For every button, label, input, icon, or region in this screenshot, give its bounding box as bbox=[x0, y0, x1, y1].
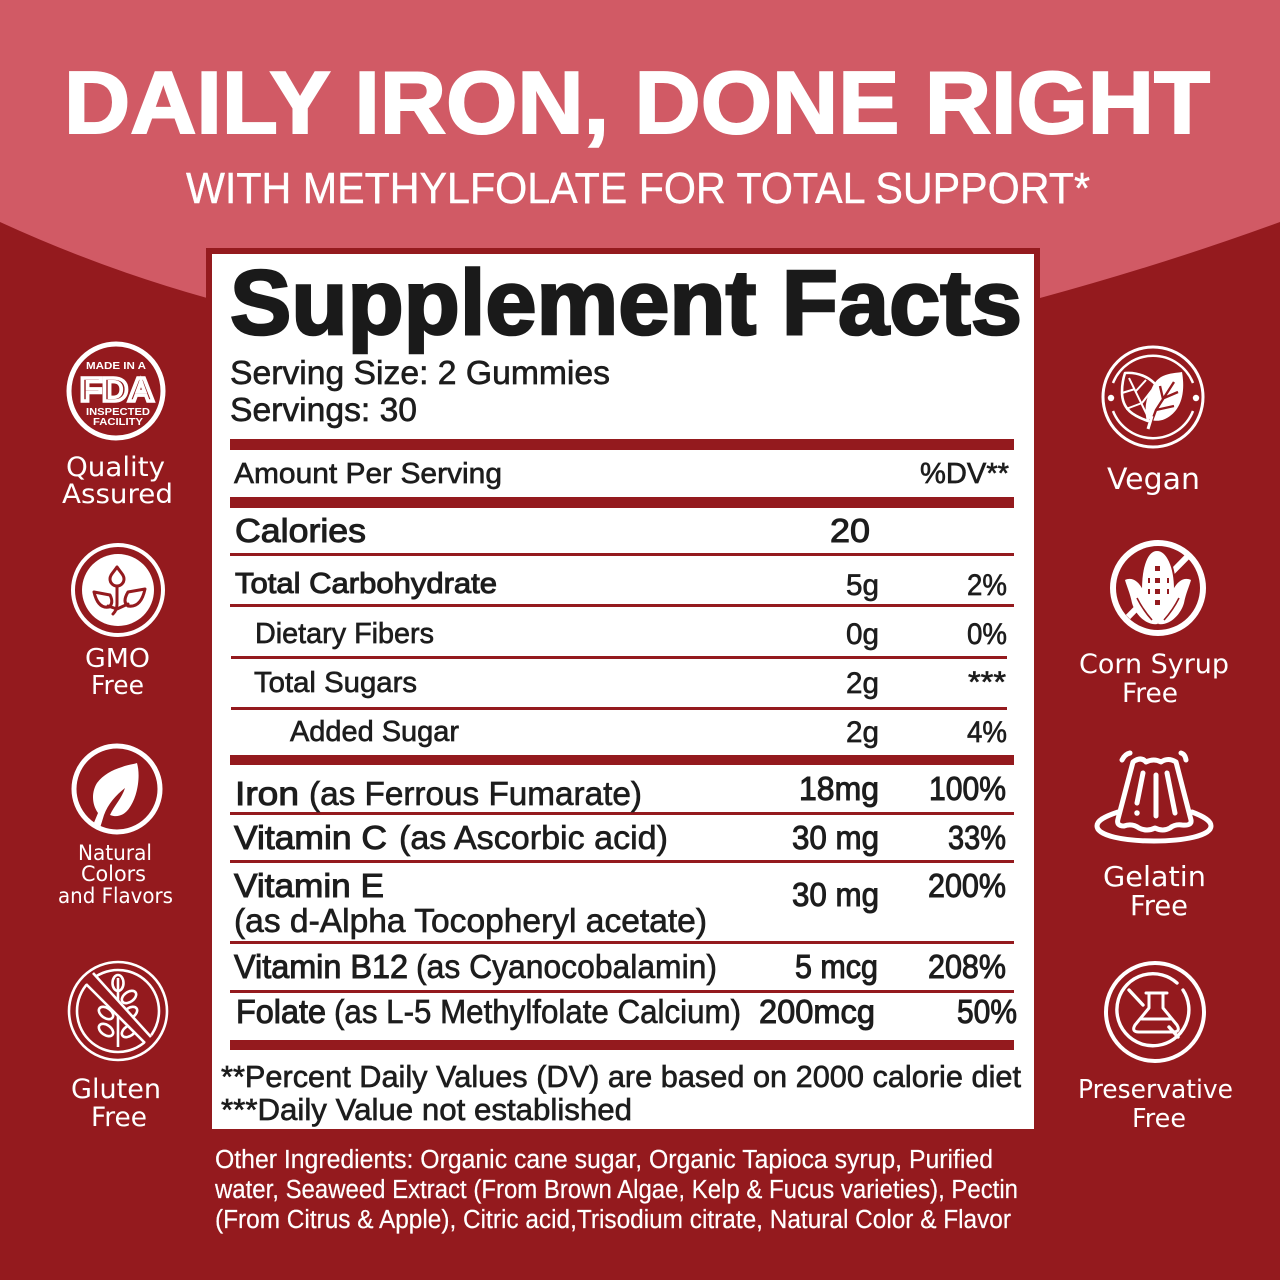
label: natural colors and flavors bbox=[58, 841, 173, 908]
badge: preservative free bbox=[1078, 963, 1233, 1134]
row: total carbohydrate: Total Carbohydrate bbox=[235, 568, 497, 600]
row: folate: 200mcg bbox=[759, 993, 875, 1030]
label: GMO free bbox=[85, 644, 150, 701]
label: quality assured: Quality bbox=[66, 452, 165, 483]
icon: FDA seal: FACILITY bbox=[93, 416, 143, 428]
label: gluten free: Free bbox=[91, 1102, 147, 1133]
icon: FDA seal: MADE IN A bbox=[86, 360, 146, 372]
row: vitamin c: (as Ascorbic acid) bbox=[399, 819, 668, 856]
badge: gelatin free bbox=[1097, 753, 1211, 922]
row: iron: (as Ferrous Fumarate) bbox=[309, 775, 642, 812]
row: calories: Calories bbox=[235, 512, 366, 549]
label: quality assured bbox=[62, 452, 173, 510]
other ingredients: Other Ingredients: Organic cane sugar, Organic Tapioca syrup, Purified bbox=[215, 1146, 993, 1174]
panel: supplement facts bbox=[206, 248, 1040, 1130]
label: GMO free: Free bbox=[91, 671, 144, 701]
row: total sugars: Total Sugars bbox=[254, 667, 417, 699]
row: calories bbox=[235, 512, 870, 549]
row: vitamin b12: 5 mcg bbox=[795, 948, 878, 985]
icon: jelly mold bbox=[1097, 753, 1211, 841]
label: corn syrup free: Free bbox=[1122, 678, 1178, 709]
row: total sugars bbox=[254, 666, 1006, 700]
badge: gluten free bbox=[69, 962, 167, 1133]
footnotes: ***Daily Value not established bbox=[221, 1092, 632, 1127]
row: dietary fibers: Dietary Fibers bbox=[255, 618, 434, 650]
badge: vegan bbox=[1103, 347, 1203, 496]
label: natural colors and flavors: and Flavors bbox=[58, 884, 173, 908]
label: GMO free: GMO bbox=[85, 644, 150, 674]
label: preservative free: Preservative bbox=[1078, 1075, 1233, 1105]
row: vitamin c: Vitamin C bbox=[234, 819, 387, 856]
row: vitamin b12 bbox=[234, 948, 1006, 985]
row: vitamin e: Vitamin E bbox=[234, 867, 384, 904]
icon: crossed corn bbox=[1113, 543, 1203, 633]
row: iron: 100% bbox=[929, 770, 1006, 807]
row: iron bbox=[235, 770, 1006, 812]
label: corn syrup free bbox=[1079, 649, 1229, 709]
row: amount per serving: Amount Per Serving bbox=[234, 458, 502, 490]
icon: FDA seal bbox=[69, 344, 163, 438]
row: added sugar: Added Sugar bbox=[290, 716, 459, 748]
footnotes bbox=[221, 1059, 1021, 1127]
label: gelatin free bbox=[1103, 860, 1206, 922]
row: amount per serving: %DV** bbox=[920, 458, 1009, 490]
label: gelatin free: Gelatin bbox=[1103, 860, 1206, 893]
label: quality assured: Assured bbox=[62, 479, 173, 510]
icon: vegan leaves bbox=[1103, 347, 1203, 447]
other ingredients: (From Citrus & Apple), Citric acid,Trisodium citrate, Natural Color & Flavor bbox=[215, 1206, 1011, 1234]
row: folate: Folate bbox=[236, 993, 326, 1030]
badge: GMO free bbox=[73, 545, 163, 701]
row: total sugars: *** bbox=[968, 666, 1006, 699]
row: iron: Iron bbox=[235, 775, 299, 812]
row: added sugar: 2g bbox=[846, 716, 879, 749]
row: vitamin e: 30 mg bbox=[792, 876, 879, 913]
row: iron: 18mg bbox=[799, 770, 879, 807]
row: dietary fibers: 0g bbox=[846, 618, 879, 651]
badge: corn syrup free bbox=[1079, 543, 1229, 709]
icon: FDA seal: INSPECTED bbox=[86, 406, 150, 418]
row: vitamin c: 33% bbox=[948, 819, 1006, 856]
label: natural colors and flavors: Natural bbox=[78, 841, 152, 865]
other ingredients bbox=[214, 1146, 1018, 1234]
icon: sprout seal bbox=[73, 545, 163, 635]
row: added sugar: 4% bbox=[967, 716, 1007, 749]
row: vitamin e: (as d-Alpha Tocopheryl acetate) bbox=[234, 902, 707, 939]
row: vitamin c bbox=[234, 819, 1006, 856]
row: amount per serving bbox=[234, 458, 1009, 490]
table rules bbox=[230, 439, 1014, 1050]
row: dietary fibers bbox=[255, 618, 1007, 651]
row: vitamin e bbox=[234, 867, 1006, 939]
other ingredients: water, Seaweed Extract (From Brown Algae, Kelp & Fucus varieties), Pectin bbox=[214, 1176, 1018, 1204]
row: folate bbox=[236, 993, 1017, 1030]
row: total carbohydrate: 2% bbox=[967, 569, 1007, 602]
label: gelatin free: Free bbox=[1130, 889, 1188, 922]
label: natural colors and flavors: Colors bbox=[81, 862, 146, 886]
label: gluten free bbox=[71, 1074, 161, 1133]
icon: FDA seal: FDA bbox=[80, 371, 154, 408]
serving information: Servings: 30 bbox=[230, 391, 417, 428]
icon: crossed flask bbox=[1106, 963, 1204, 1061]
row: folate: 50% bbox=[957, 993, 1017, 1030]
badge: natural colors and flavors bbox=[58, 746, 173, 908]
subtitle: WITH METHYLFOLATE FOR TOTAL SUPPORT* bbox=[186, 164, 1090, 213]
label: gluten free: Gluten bbox=[71, 1074, 161, 1105]
row: vitamin b12: (as Cyanocobalamin) bbox=[416, 948, 717, 985]
row: total carbohydrate bbox=[235, 568, 1007, 602]
label: corn syrup free: Corn Syrup bbox=[1079, 649, 1229, 680]
label: preservative free: Free bbox=[1132, 1104, 1186, 1134]
header curved band bbox=[0, 0, 1280, 340]
row: calories: 20 bbox=[830, 512, 870, 549]
label: vegan: Vegan bbox=[1107, 462, 1200, 496]
heading: supplement facts: Supplement Facts bbox=[230, 252, 1022, 354]
row: vitamin c: 30 mg bbox=[792, 819, 879, 856]
row: dietary fibers: 0% bbox=[967, 618, 1007, 651]
label: preservative free bbox=[1078, 1075, 1233, 1134]
icon: leaf in circle bbox=[74, 746, 160, 832]
serving information bbox=[230, 354, 610, 428]
row: total carbohydrate: 5g bbox=[846, 569, 879, 602]
row: total sugars: 2g bbox=[846, 667, 879, 700]
row: added sugar bbox=[290, 716, 1007, 749]
row: folate: (as L-5 Methylfolate Calcium) bbox=[334, 993, 741, 1030]
footnotes: **Percent Daily Values (DV) are based on 2000 calorie diet bbox=[221, 1059, 1021, 1094]
serving information: Serving Size: 2 Gummies bbox=[230, 354, 610, 391]
title: DAILY IRON, DONE RIGHT bbox=[64, 53, 1210, 152]
icon: crossed wheat bbox=[69, 962, 167, 1060]
badge: quality assured bbox=[62, 344, 173, 510]
row: vitamin e: 200% bbox=[928, 867, 1006, 904]
row: vitamin b12: Vitamin B12 bbox=[234, 948, 408, 985]
row: vitamin b12: 208% bbox=[928, 948, 1006, 985]
